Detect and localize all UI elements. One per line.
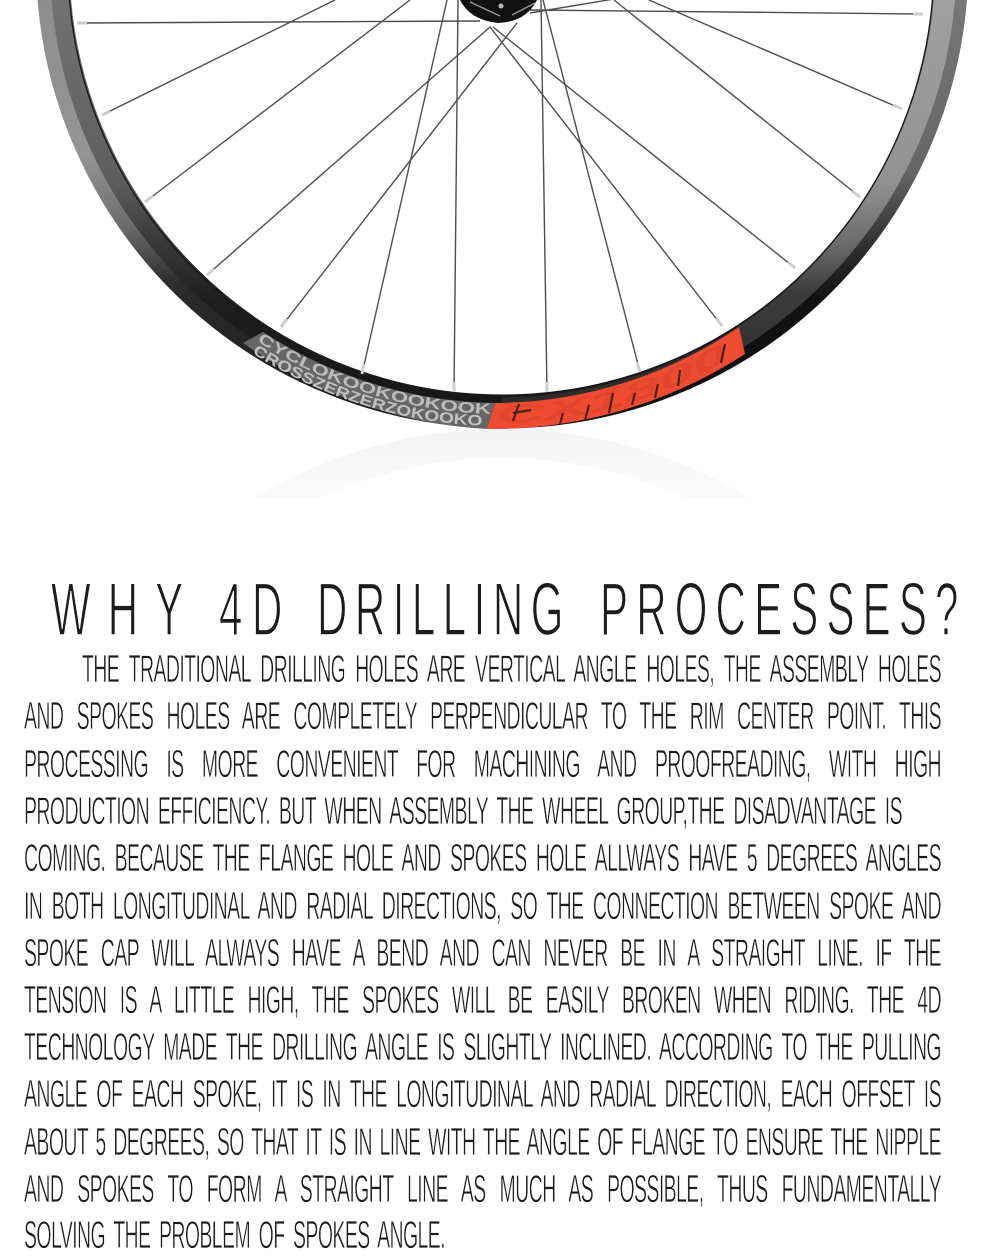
rim decal: red CX1800: CX1800: [499, 346, 723, 422]
body text block: AND SPOKES HOLES ARE COMPLETELY PERPENDICULAR TO THE RIM CENTER POINT. THIS: [24, 694, 941, 738]
body text block: PRODUCTION EFFICIENCY. BUT WHEN ASSEMBLY THE WHEEL GROUP,THE DISADVANTAGE IS: [24, 790, 902, 832]
title: DRILLING: [317, 567, 563, 650]
title: PROCESSES?: [600, 567, 958, 650]
body text block: THE TRADITIONAL DRILLING HOLES ARE VERTICAL ANGLE HOLES, THE ASSEMBLY HOLES: [82, 648, 941, 690]
body text block: PROCESSING IS MORE CONVENIENT FOR MACHINING AND PROOFREADING, WITH HIGH: [24, 742, 941, 786]
body text block: COMING. BECAUSE THE FLANGE HOLE AND SPOKES HOLE ALLWAYS HAVE 5 DEGREES ANGLES: [24, 836, 941, 880]
rim decal: red CX1800: [487, 327, 745, 429]
body text block: TENSION IS A LITTLE HIGH, THE SPOKES WILL BE EASILY BROKEN WHEN RIDING. THE 4D: [24, 978, 941, 1022]
body text block: SOLVING THE PROBLEM OF SPOKES ANGLE.: [24, 1214, 445, 1257]
body text block: AND SPOKES TO FORM A STRAIGHT LINE AS MUCH AS POSSIBLE, THUS FUNDAMENTALLY: [24, 1168, 941, 1210]
body text block: ANGLE OF EACH SPOKE, IT IS IN THE LONGITUDINAL AND RADIAL DIRECTION, EACH OFFSET IS: [24, 1072, 941, 1116]
body text block: SPOKE CAP WILL ALWAYS HAVE A BEND AND CAN NEVER BE IN A STRAIGHT LINE. IF THE: [24, 932, 941, 974]
body text block: TECHNOLOGY MADE THE DRILLING ANGLE IS SLIGHTLY INCLINED. ACCORDING TO THE PULLING: [24, 1026, 941, 1068]
title: [51, 567, 958, 650]
title: 4D: [219, 567, 282, 650]
wheel photograph: [38, 0, 967, 458]
hub: [460, 0, 537, 23]
body text block: IN BOTH LONGITUDINAL AND RADIAL DIRECTIONS, SO THE CONNECTION BETWEEN SPOKE AND: [24, 884, 941, 928]
rim decal: grey graphic: CROSSZERZERZOKOOKO: [254, 346, 482, 426]
rim reflection: [254, 429, 750, 498]
spoke nipples: [77, 14, 923, 392]
spokes: [77, 0, 923, 392]
rim decal: grey graphic: CYCLOKOOKOOKOOK: [260, 334, 490, 414]
title: WHY: [51, 567, 183, 650]
body text block: ABOUT 5 DEGREES, SO THAT IT IS IN LINE WITH THE ANGLE OF FLANGE TO ENSURE THE NIPPLE: [24, 1120, 941, 1164]
rim: [38, 0, 967, 429]
